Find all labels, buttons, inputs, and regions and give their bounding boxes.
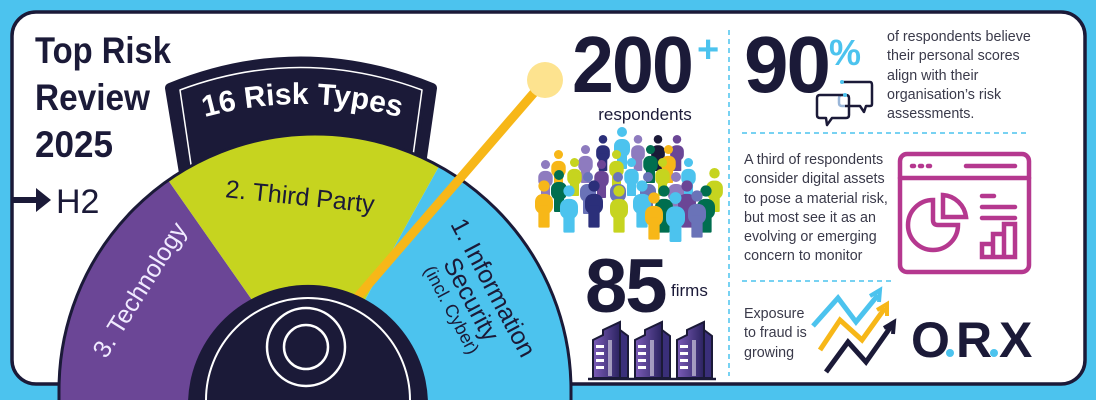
segment: technology [59,180,315,390]
needle [355,62,563,300]
text: digital assets [744,152,888,264]
banner: 16 Risk Types: 16 Risk Types [202,82,402,117]
logo: ORX [911,312,1032,368]
text: fraud: growing [744,345,794,361]
title: 2025 [35,124,113,165]
label: third party: 2. Third Party [224,175,376,219]
segment: information security [315,166,571,400]
logo: ORX: O [911,312,950,368]
stat: 85 firms: firms [671,281,708,300]
stat: 85 firms [585,244,708,329]
hub [188,285,428,400]
title: Top Risk [35,30,171,71]
stat: 90%: % [829,32,861,73]
text: digital assets: to pose a material risk, [744,191,888,207]
text: digital assets: but most see it as an [744,210,876,226]
stat: 85 firms: 85 [585,244,666,329]
text: 90% description: align with their [887,68,979,84]
stat: 200+ respondents: + [697,29,719,71]
stat: 90%: 90 [744,20,829,109]
banner: 16 Risk Types [165,56,437,172]
label: information security [407,214,541,382]
arrow H2: H2 [56,183,99,221]
icon: crowd [535,127,723,242]
title: Review [35,77,150,118]
label: information security: (incl. Cyber) [420,262,483,357]
text: digital assets: A third of respondents [744,152,883,168]
text: fraud [744,306,807,361]
text: digital assets: concern to monitor [744,248,863,264]
logo: ORX: X [999,312,1032,368]
stat: 200+ respondents: 200 [572,20,692,109]
segment: third party [168,134,439,390]
label: information security: Security [437,253,505,346]
icon: chat bubbles [817,80,872,125]
title [35,30,171,165]
logo: ORX: R [956,312,992,368]
stat: 200+ respondents: respondents [598,105,692,124]
text: digital assets: evolving or emerging [744,229,877,245]
gauge [59,62,571,400]
label: technology: 3. Technology [87,217,193,363]
text: fraud: Exposure [744,306,804,322]
text: 90% description [887,29,1031,122]
icon: dashboard [900,154,1029,272]
icon: buildings [588,322,716,379]
text: digital assets: consider digital assets [744,171,885,187]
text: 90% description: their personal scores [887,48,1020,64]
arrow H2 [13,183,99,221]
text: fraud: to fraud is [744,325,807,341]
label: information security: 1. Information [445,214,541,362]
divider [728,30,730,376]
text: 90% description: of respondents believe [887,29,1031,45]
text: 90% description: assessments. [887,106,974,122]
icon: rising arrows [813,290,894,372]
text: 90% description: organisation’s risk [887,87,1002,103]
